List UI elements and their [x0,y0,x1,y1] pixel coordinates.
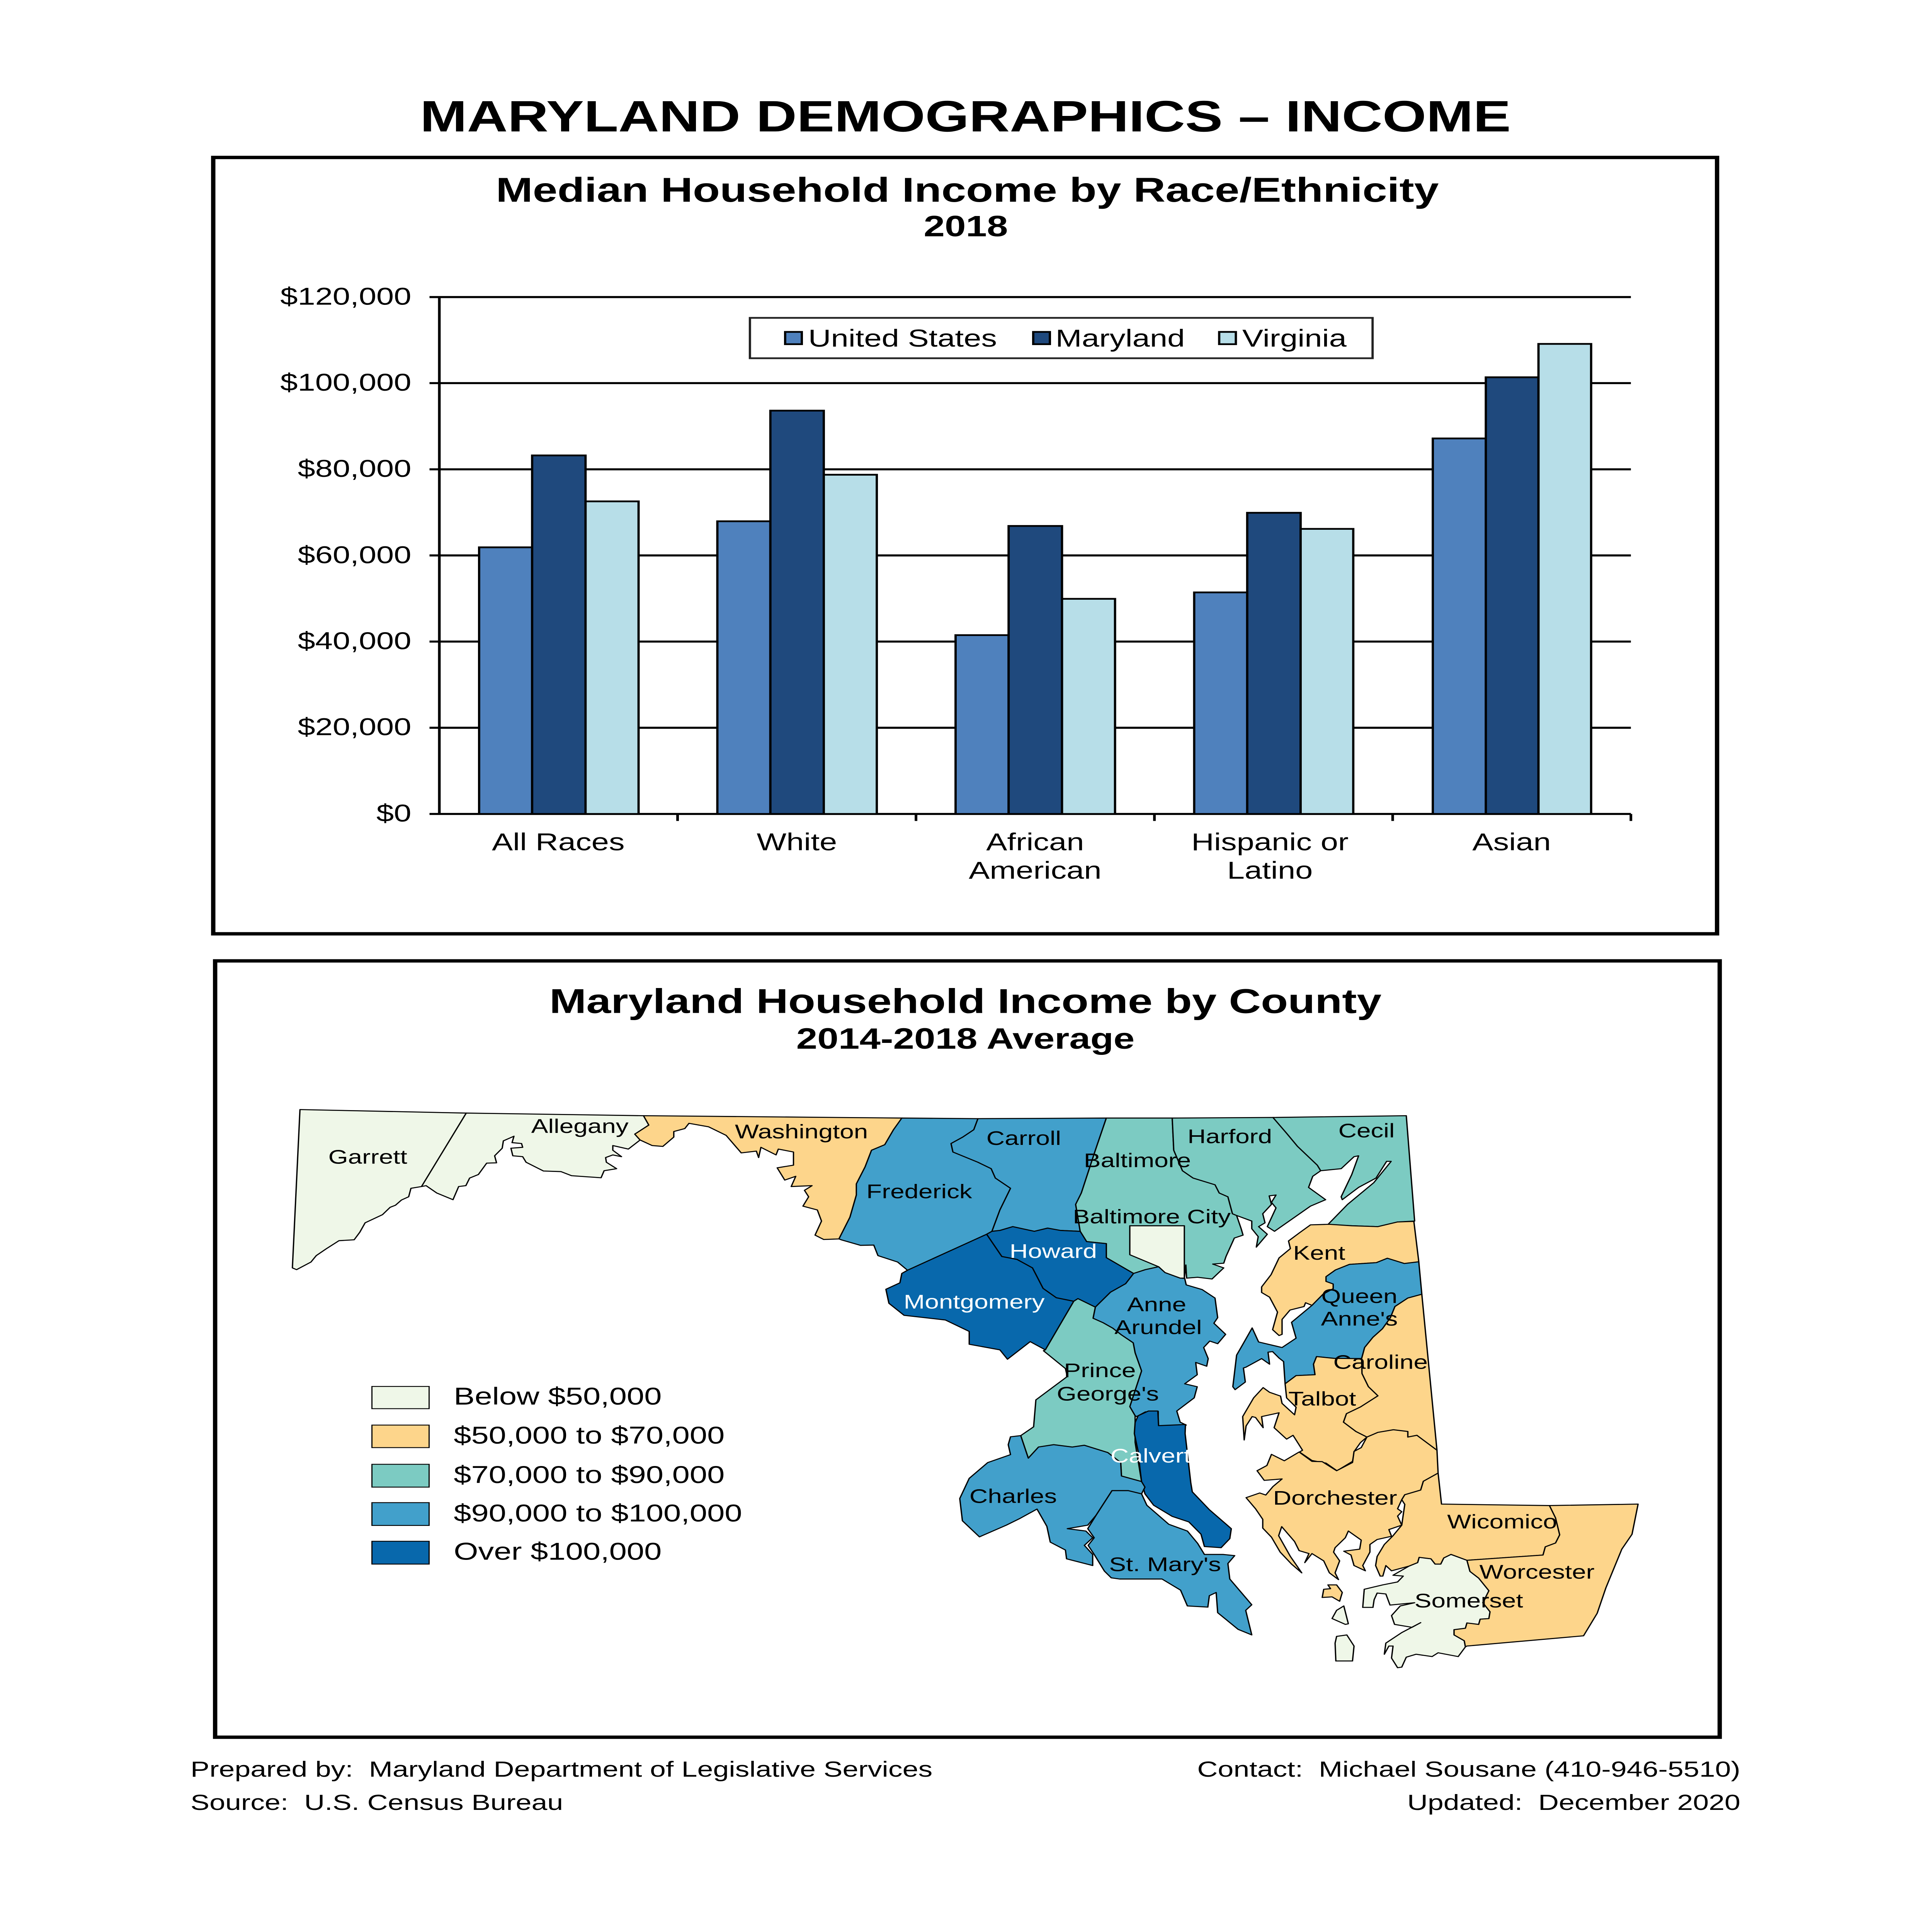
category labels: Asian [1472,828,1551,855]
y axis labels: $80,000 [298,455,411,482]
county name labels: Baltimore City [1073,1206,1231,1228]
county name labels: Anne [1127,1294,1186,1316]
y axis labels [280,283,411,827]
county: Allegany [422,1113,649,1200]
county name labels: Anne's [1321,1308,1398,1330]
county: Frederick [839,1118,1010,1270]
map heading: Maryland Household Income by County [549,982,1381,1020]
footer: contact and update date [1197,1757,1740,1815]
county name labels: Frederick [866,1181,972,1202]
bars [479,344,1591,814]
category labels: American [969,857,1102,884]
county: Harford [1172,1117,1326,1247]
y axis labels: $100,000 [280,369,411,396]
footer: preparer and source: Prepared by: Maryland Department of Legislative Services [190,1757,932,1781]
county: Anne Arundel [1093,1267,1226,1426]
y axis labels: $40,000 [298,628,411,655]
bars: White [717,411,877,814]
map subheading: 2014-2018 Average [796,1022,1134,1055]
county map [293,1110,1638,1668]
county name labels: Arundel [1114,1317,1202,1338]
map legend: $90,000 to $100,000 [454,1500,742,1527]
county: Baltimore [1076,1118,1243,1279]
map legend: Over $100,000 [454,1538,662,1565]
county: Calvert [1134,1411,1231,1548]
county name labels: Harford [1187,1126,1272,1148]
county name labels: Allegany [531,1116,629,1137]
county: Howard [986,1227,1134,1307]
county name labels [328,1116,1595,1612]
county name labels: Wicomico [1447,1511,1557,1533]
y axis labels: $120,000 [280,283,411,310]
county: Dorchester [1246,1430,1438,1580]
county name labels: St. Mary's [1109,1554,1221,1575]
county name labels: Carroll [986,1128,1061,1149]
county: Talbot [1243,1357,1378,1471]
county: Garrett [293,1110,466,1270]
county name labels: Queen [1321,1286,1398,1307]
category labels: All Races [492,828,625,855]
y axis labels: $0 [376,800,411,827]
chart heading: Median Household Income by Race/Ethnicity [496,170,1439,209]
map legend: Below $50,000 [454,1383,662,1410]
chart legend: United States [808,325,997,352]
category labels: Hispanic or [1191,828,1349,855]
chart legend: Virginia [1242,325,1347,352]
county name labels: Kent [1293,1242,1345,1264]
map legend: $50,000 to $70,000 [454,1422,724,1449]
county: Montgomery [886,1234,1074,1359]
county name labels: Talbot [1288,1388,1356,1410]
county name labels: Cecil [1338,1120,1395,1142]
county: Worcester [1454,1504,1638,1647]
category labels [492,828,1551,884]
footer: preparer and source: Source: U.S. Census Bureau [190,1790,563,1815]
bars: Asian [1433,344,1591,814]
map legend: $70,000 to $90,000 [454,1461,724,1488]
map legend [372,1383,742,1565]
county: Charles [960,1435,1145,1566]
chart legend: Maryland [1056,325,1185,352]
county: Baltimore City [1130,1226,1184,1278]
county: Somerset [1363,1554,1490,1668]
county name labels: Baltimore [1084,1150,1191,1172]
county name labels: Calvert [1111,1445,1191,1467]
y axis labels: $60,000 [298,541,411,568]
footer: contact and update date: Contact: Michael Sousane (410-946-5510) [1197,1757,1740,1781]
county: St. Mary's [1088,1491,1252,1635]
county name labels: Prince [1064,1360,1136,1381]
county name labels: Caroline [1333,1352,1428,1373]
county name labels: Dorchester [1273,1487,1397,1509]
county name labels: Howard [1010,1241,1097,1262]
county name labels: Charles [969,1486,1057,1507]
county: Prince George's [1021,1299,1141,1481]
county: Caroline [1344,1294,1437,1450]
county: Cecil [1273,1116,1415,1227]
county name labels: Montgomery [904,1291,1045,1313]
county name labels: Somerset [1415,1590,1523,1612]
category labels: White [757,828,837,855]
bars: Hispanic or Latino [1194,513,1353,814]
county name labels: Washington [735,1121,868,1143]
county: Kent [1262,1221,1419,1335]
chart legend [750,318,1372,358]
county name labels: Garrett [328,1146,407,1168]
county: Washington [635,1116,902,1240]
county name labels: Worcester [1480,1561,1595,1583]
category labels: Latino [1227,857,1313,884]
islands [1322,1585,1354,1661]
county name labels: George's [1057,1383,1159,1405]
chart subheading: 2018 [924,210,1008,243]
category labels: African [986,828,1084,855]
bars: All Races [479,456,639,814]
y axis labels: $20,000 [298,714,411,741]
gridlines and axes [430,297,1631,821]
bars: African American [956,526,1115,814]
panel: median household income bar chart [213,158,1717,934]
county: Carroll [951,1118,1106,1231]
county: Queen Anne's [1233,1258,1422,1389]
footer: preparer and source [190,1757,932,1815]
panel: county income map [215,961,1720,1737]
footer: contact and update date: Updated: December 2020 [1407,1790,1740,1815]
county: Wicomico [1376,1473,1560,1576]
title: MARYLAND DEMOGRAPHICS – INCOME [420,92,1511,141]
